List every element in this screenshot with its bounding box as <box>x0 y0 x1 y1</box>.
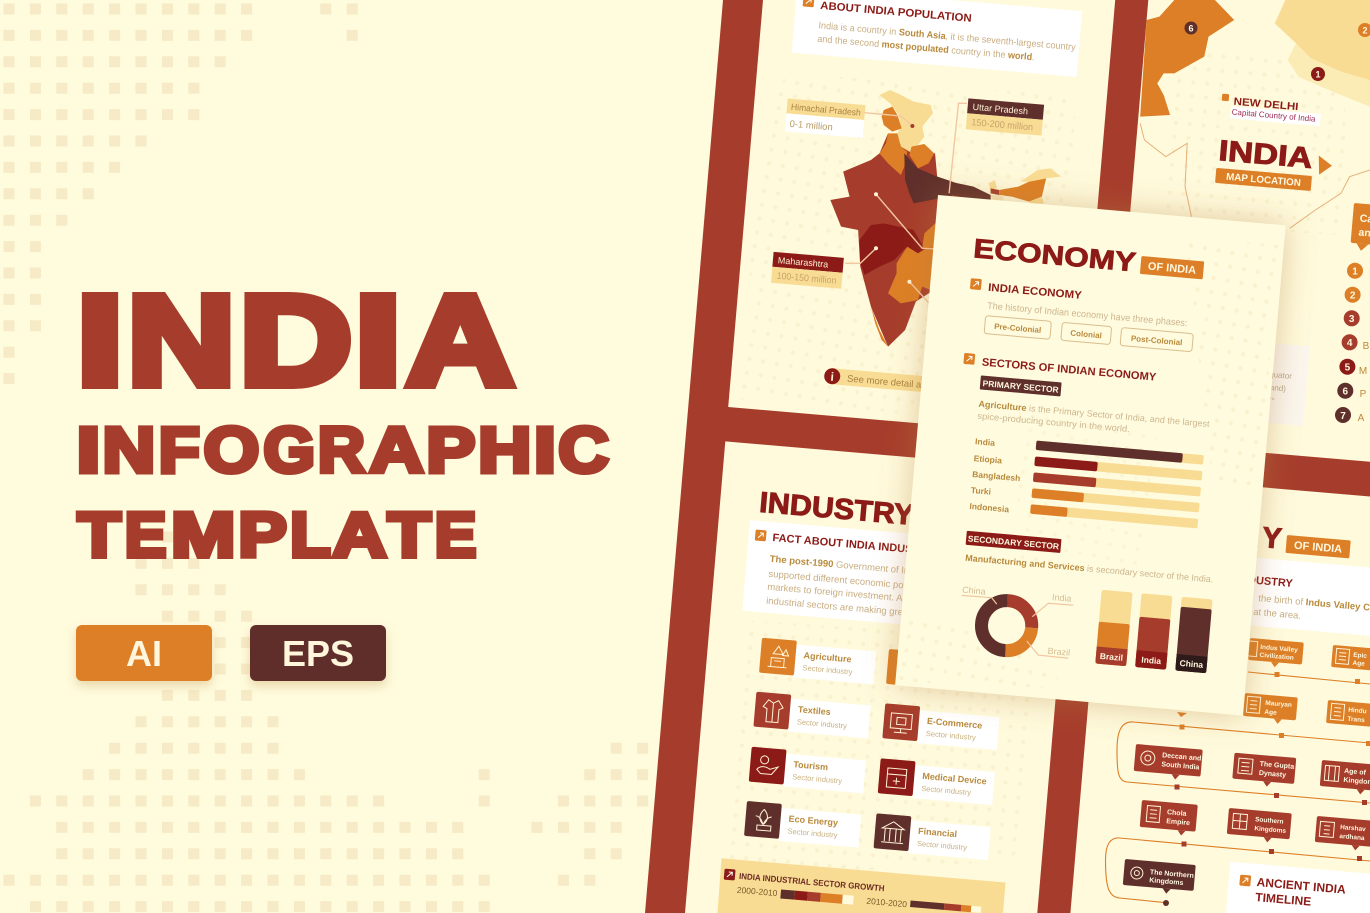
title: INFOGRAPHIC: F <box>159 414 200 486</box>
section: secondary sector: SECONDARY SECTOR <box>968 533 1060 551</box>
text box: about: and the second most populated country in the world. <box>817 34 1035 63</box>
tile: Agriculture: Agriculture <box>803 650 852 664</box>
heading: history of India: OF INDIA <box>1293 540 1343 556</box>
heading: industry: INDUSTRY <box>758 487 915 532</box>
stacked bar chart <box>1095 590 1213 673</box>
tile: Medical Device: Sector industry <box>921 784 972 797</box>
panel: ancient India timeline <box>1070 474 1370 913</box>
box: equator note: land) <box>1268 383 1287 393</box>
heading: history of India: HISTORY <box>1148 512 1283 555</box>
tile: Eco Energy: Eco Energy <box>788 814 838 828</box>
panel background: about India population <box>728 0 1115 437</box>
heading: India map location: MAP LOCATION <box>1226 172 1301 189</box>
section: India economy: INDIA ECONOMY <box>988 282 1083 302</box>
tile: Tourism: Tourism <box>793 759 828 772</box>
box: equator note: quator <box>1269 370 1293 381</box>
chip: Hindu Transition <box>1326 700 1370 727</box>
title: INDIA: N <box>128 270 235 412</box>
title: TEMPLATE <box>78 500 476 570</box>
badge: AI <box>76 625 212 681</box>
numbered list: 4 <box>1347 338 1353 349</box>
tile: Agriculture: Sector industry <box>802 663 853 677</box>
tile: Eco Energy <box>744 801 862 848</box>
label: New Delhi <box>1220 94 1322 126</box>
chip: Mauryan Age: Mauryan <box>1265 700 1292 709</box>
tile: Tourism <box>749 747 866 793</box>
title: TEMPLATE: E <box>125 500 166 570</box>
title: INFOGRAPHIC: H <box>478 414 531 486</box>
donut chart: India <box>1052 592 1072 604</box>
chip: Age of Kingdoms: Age of <box>1344 768 1367 777</box>
section: India economy: Pre-Colonial <box>994 322 1042 335</box>
title: INDIA: I <box>76 270 124 412</box>
tile: Agriculture <box>759 638 877 684</box>
text box: history: INDUSTRY <box>1237 573 1294 590</box>
title: INDIA <box>76 270 514 412</box>
label: Uttar Pradesh: Uttar Pradesh <box>972 102 1028 116</box>
title: INDIA: I <box>354 270 402 412</box>
note: see more detail <box>824 368 991 398</box>
box: Ancient India timeline: ANCIENT INDIA <box>1256 875 1347 897</box>
section: sectors of Indian economy: Agriculture is the Primary Sector of India, and the largest <box>978 399 1211 429</box>
numbered list: A <box>1358 413 1365 424</box>
title: INFOGRAPHIC: A <box>370 414 424 486</box>
section: India economy: The history of Indian economy have three phases: <box>987 301 1188 329</box>
chip: The Gupta Dynasty: The Gupta <box>1259 761 1294 771</box>
badge: of India <box>1140 256 1204 279</box>
tile: Textiles: Sector industry <box>797 717 847 731</box>
text box: industry facts: FACT ABOUT INDIA INDUSTRY <box>772 532 935 558</box>
panel: industrial sector growth <box>718 858 1006 913</box>
text box: history <box>1194 553 1370 641</box>
tile: Financial <box>873 813 991 860</box>
title: TEMPLATE: L <box>290 500 331 570</box>
tile: Medical Device <box>878 758 995 805</box>
label: New Delhi: NEW DELHI <box>1233 96 1299 113</box>
card dots <box>1164 237 1280 494</box>
title: INFOGRAPHIC: R <box>318 414 365 486</box>
bar chart: primary sector: Bangladesh <box>972 469 1021 483</box>
numbered list: M <box>1359 366 1367 377</box>
note: see more detail: See more detail about <box>847 374 941 392</box>
map markers: 1 <box>1315 70 1321 80</box>
label: New Delhi: Capital Country of India <box>1231 108 1316 124</box>
title: INFOGRAPHIC: P <box>426 414 475 486</box>
map: India states population <box>830 90 1061 347</box>
chip: Deccan and South India: Deccan and <box>1162 752 1202 763</box>
numbered list: 7 <box>1340 411 1346 422</box>
panel: industrial sector growth: INDIA INDUSTRIAL SECTOR GROWTH <box>739 871 885 893</box>
text box: about <box>792 0 1082 77</box>
chip: The Northern Kingdoms: Kingdoms <box>1149 877 1184 887</box>
donut chart <box>957 584 1075 658</box>
mockup red frame <box>645 0 1370 913</box>
chip: Southern Kingdoms: Kingdoms <box>1254 825 1287 835</box>
donut chart: China <box>962 585 986 597</box>
tile: E-Commerce: E-Commerce <box>927 716 983 731</box>
tile: Textiles <box>753 692 871 738</box>
note: see more detail: i <box>830 370 834 384</box>
chip: Deccan and South India <box>1133 744 1203 782</box>
timeline lines <box>1106 672 1370 903</box>
numbered list: B <box>1363 341 1370 352</box>
label: Maharashtra: 100-150 million <box>776 271 837 287</box>
section: sectors of Indian economy <box>959 353 1214 441</box>
bar chart: primary sector <box>969 435 1204 531</box>
section: sectors of Indian economy: SECTORS OF INDIAN ECONOMY <box>981 356 1157 384</box>
panel: about India population <box>739 0 1093 427</box>
box: Ancient India timeline <box>1226 862 1370 913</box>
label: Uttar Pradesh: 150-200 million <box>971 117 1034 133</box>
tile: Medical Device: Medical Device <box>922 771 987 786</box>
timeline nodes <box>1163 672 1370 906</box>
title: INDIA: D <box>240 270 352 412</box>
chip: Epic Age: Age <box>1352 660 1365 668</box>
numbered list: 3 <box>1349 314 1355 325</box>
panel: industry <box>685 441 1075 913</box>
numbered list: 2 <box>1350 290 1356 302</box>
heading: economy: ECONOMY <box>972 233 1137 277</box>
chip: Epic Age <box>1331 645 1370 671</box>
label: Himachal Pradesh <box>785 98 865 138</box>
section: India economy: Post-Colonial <box>1131 334 1183 347</box>
chip: Mauryan Age: Age <box>1264 709 1277 717</box>
numbered list: 1 <box>1352 266 1358 278</box>
map: India location states <box>1140 0 1370 228</box>
text box: industry facts: The post-1990 Government of India <box>769 554 923 578</box>
heading: India map location: INDIA <box>1217 135 1314 175</box>
badge: AI: AI <box>126 633 162 674</box>
numbered list <box>1335 263 1370 424</box>
map leader lines <box>845 103 967 305</box>
chip: Indus Valley Civilization: Indus Valley <box>1260 644 1298 654</box>
chip: The Gupta Dynasty: Dynasty <box>1259 770 1286 779</box>
section: India economy: Colonial <box>1070 329 1102 340</box>
box: equator note <box>1253 342 1310 426</box>
title: TEMPLATE: A <box>332 500 386 570</box>
label: Himachal Pradesh: Himachal Pradesh <box>791 102 861 118</box>
tile: Textiles: Textiles <box>798 704 831 717</box>
tile: E-Commerce <box>882 703 1000 750</box>
title: INFOGRAPHIC: I <box>76 414 100 486</box>
panel dots: map location <box>1160 50 1345 235</box>
title: TEMPLATE: M <box>171 500 235 570</box>
box: Ancient India timeline: TIMELINE <box>1255 890 1312 909</box>
text box: about: India is a country in South Asia, it is the seventh-largest country <box>818 20 1076 53</box>
section: secondary sector: Manufacturing and Services is secondary sector of the India. <box>965 553 1214 584</box>
label: Uttar Pradesh <box>966 98 1044 136</box>
donut chart: Brazil <box>1047 646 1071 658</box>
chip: Southern Kingdoms <box>1226 808 1292 844</box>
badge: EPS: EPS <box>282 633 354 674</box>
section: sectors of Indian economy: spice-producing country in the world. <box>977 411 1130 434</box>
title: INFOGRAPHIC: I <box>534 414 556 486</box>
chip: Harshavardhana <box>1314 816 1370 852</box>
chip: Harshavardhana: Harshav <box>1340 824 1366 833</box>
tile: E-Commerce: Sector industry <box>926 729 976 742</box>
title: INFOGRAPHIC: N <box>102 414 155 486</box>
chip: Hindu Transition: Trans <box>1347 716 1365 724</box>
title: INFOGRAPHIC: G <box>264 414 315 486</box>
title: INFOGRAPHIC <box>76 414 609 486</box>
map markers: 2 <box>1362 26 1368 36</box>
text box: industry facts: markets to foreign investment. As <box>767 582 908 605</box>
chip: Age of Kingdoms <box>1319 760 1370 796</box>
text box: industry facts: supported different economic policies <box>768 569 925 593</box>
badge: EPS <box>250 625 386 681</box>
background dotted world map <box>4 9 648 907</box>
bar chart: primary sector: Turki <box>970 485 991 497</box>
stacked bar chart: India <box>1141 655 1162 666</box>
heading: history of India <box>1148 512 1352 561</box>
numbered list: P <box>1360 389 1367 400</box>
chip: Chola Empire <box>1139 800 1198 837</box>
chip: Epic Age: Epic <box>1353 652 1368 660</box>
title: INFOGRAPHIC: C <box>558 414 609 486</box>
bar chart: primary sector: Indonesia <box>969 501 1010 514</box>
bar chart: primary sector: Etiopia <box>973 453 1003 466</box>
tile: Tourism: Sector industry <box>792 772 843 786</box>
label: Himachal Pradesh: 0-1 million <box>789 119 833 133</box>
chip: Chola Empire: Chola <box>1167 809 1187 818</box>
card: economy of India <box>895 195 1286 716</box>
panel dots: industry <box>725 620 1040 880</box>
badge: of India: OF INDIA <box>1147 261 1197 277</box>
panel dots <box>739 71 1086 427</box>
stacked bar chart: Brazil <box>1099 651 1123 663</box>
panel: industrial sector growth: 2000-2010 <box>736 885 778 898</box>
chip: Indus Valley Civilization <box>1244 638 1304 669</box>
bar chart: primary sector: India <box>975 436 996 448</box>
chip: Southern Kingdoms: Southern <box>1255 816 1284 826</box>
tile: Financial: Sector industry <box>917 839 968 852</box>
section: India economy <box>966 278 1197 352</box>
stacked bar 2010-2020 <box>910 901 981 913</box>
chip: Deccan and South India: South India <box>1161 761 1200 771</box>
section: secondary sector <box>964 531 1216 584</box>
chip: The Northern Kingdoms <box>1122 859 1196 896</box>
stacked bar chart: China <box>1179 658 1204 670</box>
numbered list: 6 <box>1343 386 1349 398</box>
callout: right orange <box>1350 203 1370 253</box>
title: INFOGRAPHIC: O <box>204 414 259 486</box>
panel: industrial sector growth: 2010-2020 <box>866 896 908 909</box>
label: Maharashtra: Maharashtra <box>777 255 829 269</box>
map markers: 6 <box>1188 24 1194 34</box>
text box: industry facts: industrial sectors are making great <box>766 596 912 619</box>
title: TEMPLATE: T <box>388 500 431 570</box>
tile: Eco Energy: Sector industry <box>787 827 838 840</box>
label: Maharashtra <box>771 252 844 289</box>
chip: The Gupta Dynasty <box>1232 753 1296 789</box>
chip: Chola Empire: Empire <box>1166 818 1190 827</box>
tile: Financial: Financial <box>918 826 957 839</box>
section: sectors of Indian economy: PRIMARY SECTOR <box>982 378 1059 395</box>
box: equator note: 7° <box>1267 396 1275 405</box>
numbered list: 5 <box>1345 362 1351 374</box>
map markers <box>1184 22 1370 81</box>
panel: India map location <box>1111 0 1370 462</box>
chip: Indus Valley Civilization: Civilization <box>1259 652 1294 662</box>
text box: industry facts <box>742 520 939 627</box>
chip: Mauryan Age <box>1243 693 1298 725</box>
title: TEMPLATE: P <box>238 500 287 570</box>
chip: Harshavardhana: ardhana <box>1339 833 1365 842</box>
chip: The Northern Kingdoms: The Northern <box>1150 869 1194 880</box>
chip: Hindu Transition: Hindu <box>1348 707 1367 715</box>
title: INDIA: A <box>406 270 514 412</box>
title: TEMPLATE: T <box>78 500 121 570</box>
text box: history: at the area. <box>1253 607 1302 622</box>
title: TEMPLATE: E <box>435 500 476 570</box>
stacked bar 2000-2010 <box>780 889 854 905</box>
heading: India map location <box>1215 135 1334 193</box>
text box: about: ABOUT INDIA POPULATION <box>820 0 972 25</box>
tile: orange second column <box>886 649 909 686</box>
